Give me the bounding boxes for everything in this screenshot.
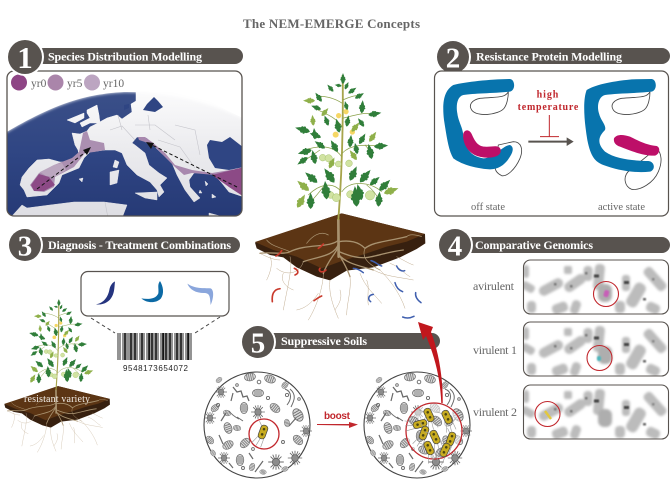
header 4: 4 [448,230,462,262]
header 2: Resistance Protein Modelling [476,50,622,64]
header 3: 3 [18,230,32,262]
highlighted bacterium [249,419,279,449]
panel: resistance protein modelling [434,71,668,216]
active state label: active state [598,202,645,213]
large red arrow to plant [418,322,443,403]
panel: species distribution modelling [5,71,244,218]
panel: resistance protein modelling: temperature [518,102,579,113]
dashed callout lines [91,317,220,333]
protein off state [443,79,522,176]
label virulent 2: virulent 2 [473,405,517,419]
header 5: Suppressive Soils [281,334,367,348]
legend: yr0 [31,78,47,90]
nematode light blue [187,284,213,305]
central tomato plant with nematodes [255,73,425,320]
label avirulent: avirulent [473,279,515,293]
karyotype avirulent [520,260,668,315]
boost arrow [317,422,358,428]
header 4 [437,227,670,263]
high temperature label: high [537,89,559,100]
nematode panel [81,272,229,316]
header 3: Diagnosis - Treatment Combinations [48,238,231,252]
legend [11,74,124,90]
barcode: 9548173654072 [123,364,189,373]
header 1: 1 [17,40,33,75]
header 5 [240,324,440,360]
red nematodes [272,244,326,302]
header 3 [7,227,240,263]
header 1: Species Distribution Modelling [48,50,202,64]
blue nematodes [353,261,421,318]
soil circle after boost [364,372,472,478]
enriched bacteria [404,403,462,465]
legend: yr5 [67,78,83,90]
legend: yr10 [103,78,124,90]
header 4: Comparative Genomics [475,238,593,252]
barcode [118,333,191,373]
protein active state [584,79,661,189]
header 5: 5 [251,328,265,360]
header 2 [435,39,670,75]
boost label: boost [324,411,351,422]
nematode mid blue [141,281,163,302]
header 1 [6,38,243,76]
off state label: off state [471,202,505,213]
resistant variety label: resistant variety [24,394,90,405]
karyotype virulent 1 [520,322,668,377]
label virulent 1: virulent 1 [473,343,517,357]
title: The NEM-EMERGE Concepts [243,16,420,31]
nematode dark blue [96,281,115,305]
map panel [5,71,244,218]
resistant variety plant [4,299,110,452]
karyotype virulent 2 [520,385,668,440]
soil circle before boost [204,372,312,478]
inhibition and transition arrow [528,115,574,146]
header 2: 2 [446,42,460,74]
